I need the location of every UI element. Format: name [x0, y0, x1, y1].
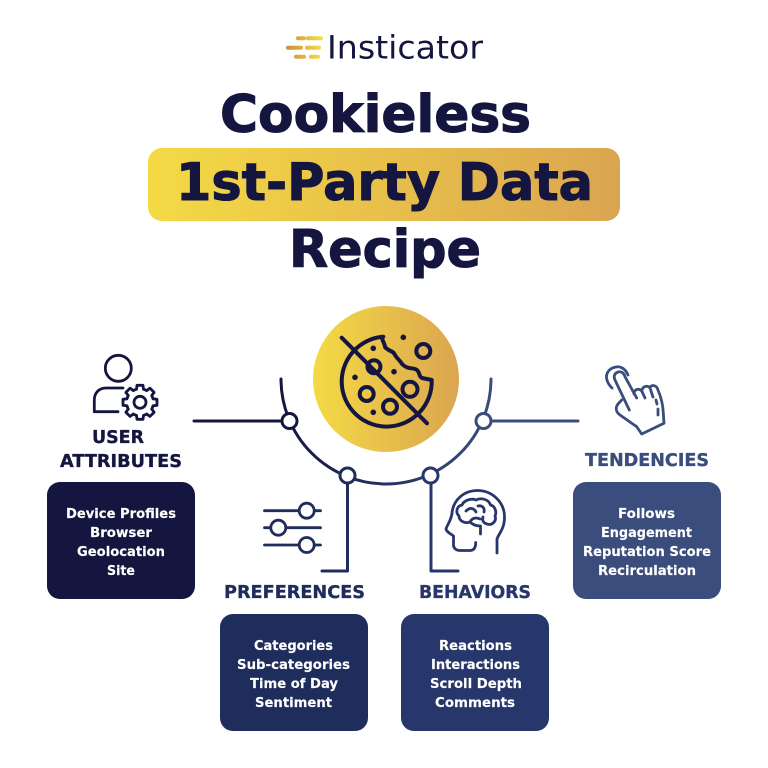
- card: tendencies: Engagement: [601, 526, 692, 541]
- heading: tendencies: TENDENCIES: [585, 451, 709, 471]
- card: tendencies: Recirculation: [598, 564, 696, 579]
- title line: Cookieless: Cookieless: [220, 85, 531, 145]
- card: user attributes: Browser: [90, 526, 153, 541]
- title line: 1st-Party Data: 1st-Party Data: [176, 153, 593, 213]
- card: user attributes: Geolocation: [77, 545, 165, 560]
- card: preferences: [220, 614, 368, 731]
- title: [148, 85, 620, 280]
- icon: crossed-out cookie: [313, 306, 459, 452]
- heading: preferences: PREFERENCES: [224, 583, 365, 603]
- card: user attributes: Device Profiles: [66, 507, 176, 522]
- icon: tapping hand: [606, 367, 664, 434]
- heading: user attributes: [60, 428, 182, 472]
- panel: preferences: [220, 503, 368, 731]
- card: tendencies: [573, 482, 721, 599]
- panel: user attributes: [47, 355, 195, 599]
- card: behaviors: Scroll Depth: [430, 677, 522, 692]
- heading: behaviors: BEHAVIORS: [419, 583, 531, 603]
- title highlight banner: [148, 148, 620, 221]
- icon: head with brain: [446, 490, 504, 553]
- card: preferences: Time of Day: [250, 677, 339, 692]
- icon: sliders: [264, 503, 320, 552]
- logo wordmark: Insticator: [327, 28, 484, 66]
- panel: behaviors: [401, 490, 549, 731]
- panel: tendencies: [573, 367, 721, 599]
- connector lines and arc: [194, 379, 578, 571]
- icon: user with gear: [94, 355, 157, 419]
- card: preferences: Sub-categories: [237, 658, 350, 673]
- card: tendencies: Reputation Score: [583, 545, 711, 560]
- heading: user attributes: ATTRIBUTES: [60, 452, 182, 472]
- card: behaviors: Interactions: [431, 658, 520, 673]
- card: behaviors: [401, 614, 549, 731]
- card: tendencies: Follows: [618, 507, 675, 522]
- card: user attributes: [47, 482, 195, 599]
- title line: Recipe: Recipe: [289, 220, 481, 280]
- card: behaviors: Reactions: [439, 639, 512, 654]
- card: preferences: Sentiment: [255, 696, 332, 711]
- icon: logo stripes: [288, 38, 321, 57]
- card: user attributes: Site: [107, 564, 135, 579]
- card: behaviors: Comments: [435, 696, 515, 711]
- card: preferences: Categories: [254, 639, 333, 654]
- logo: Insticator: [288, 28, 484, 66]
- heading: user attributes: USER: [92, 428, 145, 448]
